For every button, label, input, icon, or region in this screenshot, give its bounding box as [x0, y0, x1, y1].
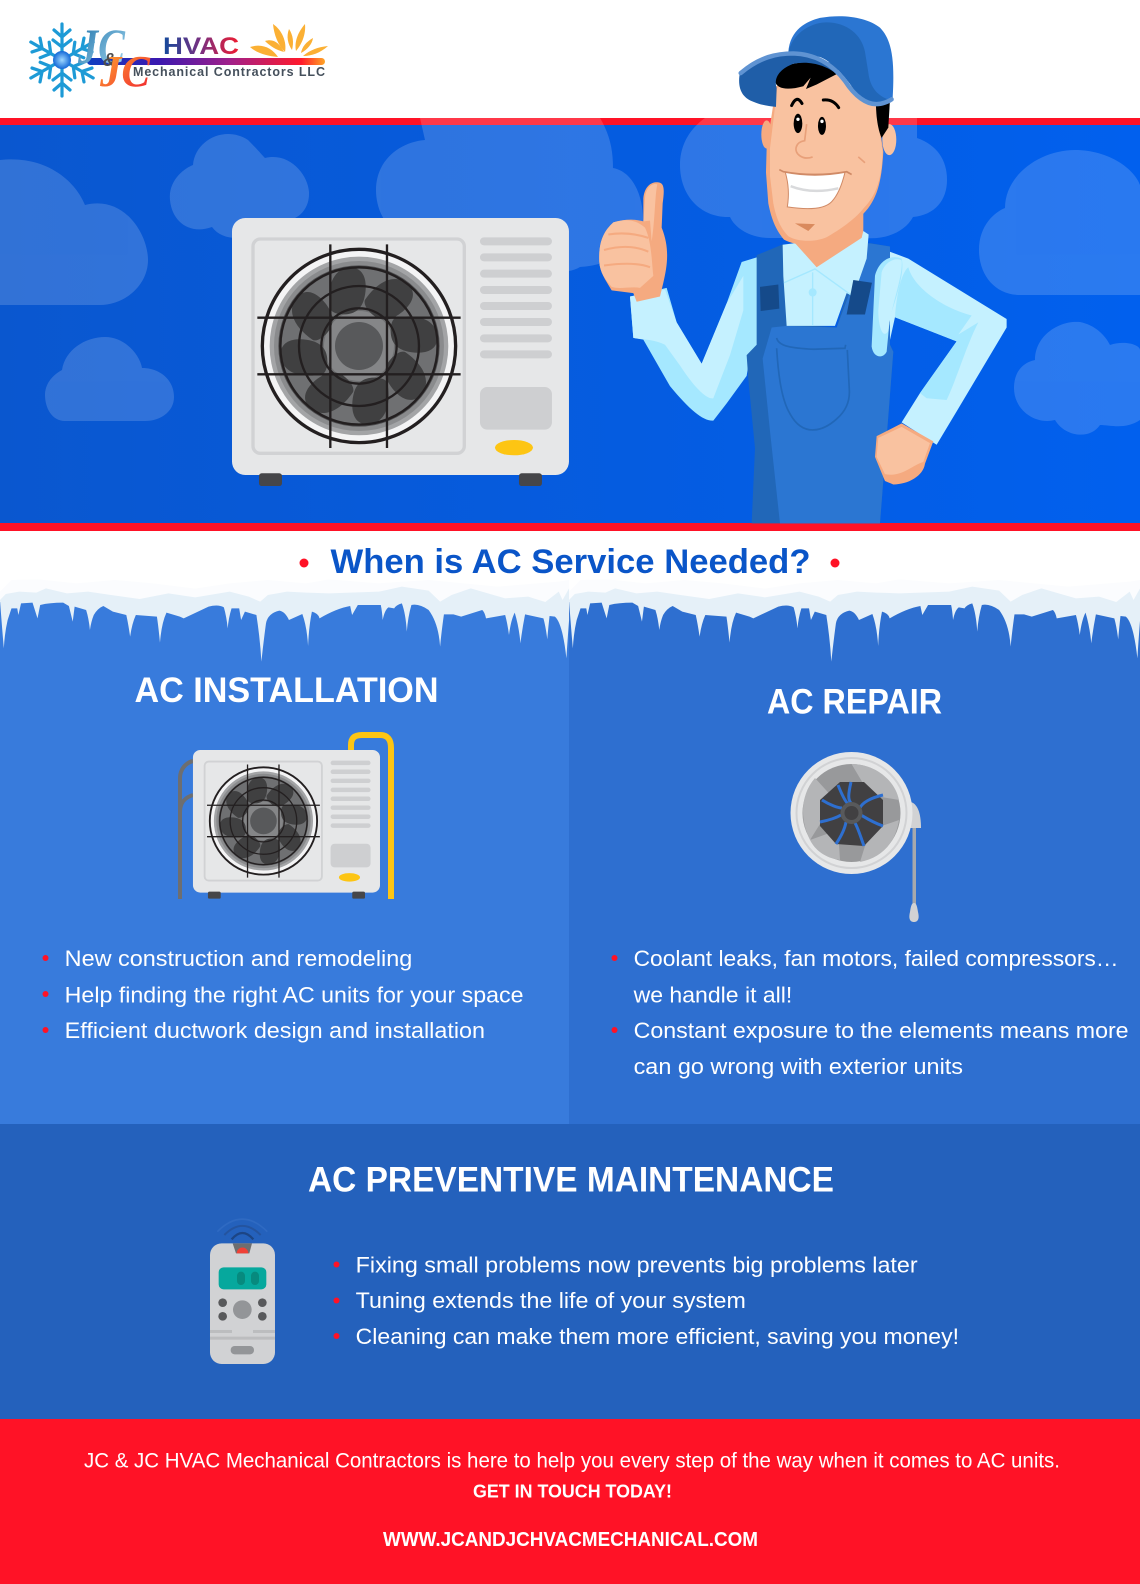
icon: fan motor: [790, 752, 921, 922]
icon: AC unit with pipes: [180, 735, 391, 899]
logo: [26, 18, 328, 96]
hero background: [0, 125, 1140, 523]
technician left arm: [630, 257, 758, 421]
overalls: [747, 243, 893, 523]
logo company name: Mechanical Contractors LLC: [133, 65, 325, 79]
repair list: we handle it all!: [633, 982, 792, 1008]
installation list: Help finding the right AC units for your space: [65, 982, 523, 1008]
maintenance list: Cleaning can make them more efficient, saving you money!: [356, 1324, 959, 1349]
thumbs up hand: [599, 182, 667, 302]
logo thermometer bar: [87, 58, 325, 65]
logo sun rays: [250, 24, 328, 57]
fist on hip: [875, 423, 933, 484]
installation list: [42, 946, 523, 1043]
logo ampersand: &: [103, 50, 116, 70]
installation list: New construction and remodeling: [65, 946, 412, 971]
maintenance background: [0, 1124, 1140, 1419]
footer message: JC & JC HVAC Mechanical Contractors is here to help you every step of the way when it comes to AC units.: [84, 1450, 1060, 1472]
footer band: [0, 1419, 1140, 1584]
repair list: [612, 946, 1129, 1079]
overalls pocket: [777, 338, 849, 430]
logo JC blue: JC: [77, 18, 126, 74]
snow and icicles left: [0, 579, 569, 662]
snow and icicles right: [569, 579, 1140, 662]
shirt collar and front: [783, 231, 869, 326]
head: [761, 62, 896, 245]
heading: preventive maintenance: AC PREVENTIVE MAINTENANCE: [308, 1160, 834, 1200]
logo snowflake: [26, 24, 98, 96]
panel: AC installation: [42, 671, 523, 1043]
maintenance list: [334, 1252, 959, 1349]
repair list: can go wrong with exterior units: [634, 1054, 963, 1079]
panel: AC repair: [612, 682, 1129, 1079]
strap patches: [760, 280, 872, 314]
title bullet left: [300, 558, 308, 568]
repair list: Coolant leaks, fan motors, failed compressors…: [634, 946, 1119, 971]
technician right arm: [873, 252, 1007, 445]
call to action: GET IN TOUCH TODAY!: [473, 1482, 672, 1502]
heading: AC installation: AC INSTALLATION: [134, 671, 438, 710]
maintenance list: Fixing small problems now prevents big problems later: [356, 1252, 918, 1278]
maintenance list: Tuning extends the life of your system: [356, 1288, 746, 1313]
heading: AC repair: AC REPAIR: [767, 682, 942, 722]
top red stripe: [0, 118, 1140, 125]
installation list: Efficient ductwork design and installation: [65, 1018, 485, 1043]
logo HVAC: HVAC: [163, 33, 239, 60]
outdoor AC unit illustration: [232, 218, 569, 486]
neck: [795, 207, 863, 269]
repair list: Constant exposure to the elements means more: [634, 1018, 1129, 1043]
cap: [739, 16, 893, 107]
logo JC red: JC: [99, 47, 151, 96]
background clouds: [0, 118, 1140, 435]
website: WWW.JCANDJCHVACMECHANICAL.COM: [383, 1529, 758, 1551]
title text: When is AC Service Needed?: [330, 543, 810, 581]
icon: remote control: [210, 1219, 275, 1364]
section title: [300, 543, 840, 581]
panel: AC preventive maintenance: [0, 1124, 1140, 1419]
panel: AC installation background: [0, 602, 569, 1124]
bottom red stripe: [0, 523, 1140, 531]
title bullet right: [830, 558, 840, 568]
technician giving thumbs up: [599, 16, 1007, 523]
panel: AC repair background: [569, 602, 1140, 1124]
